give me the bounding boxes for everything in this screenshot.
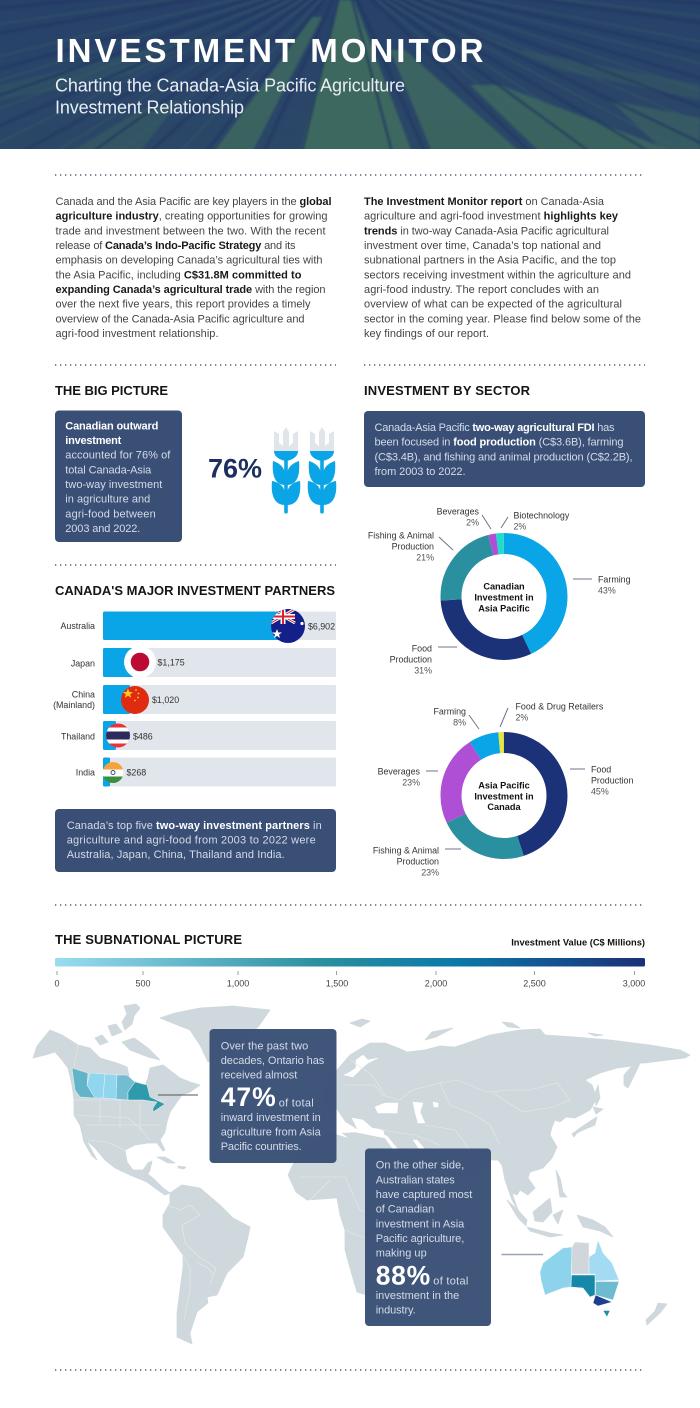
vineyard background [0,0,700,152]
legend: investment value colour scale [54,938,645,988]
donut chart: Canadian investment in Asia Pacific: Asia Pacific [478,604,530,614]
legend: investment value colour scale: Investment Value (C$ Millions) [511,938,645,948]
labels and leader lines: Biotechnology [514,510,570,520]
callout: Australia 88%: making up [376,1248,427,1260]
callout: top five partners: agriculture and agri-food from 2003 to 2022 were [67,835,316,847]
icon: wheat stalks [272,427,336,514]
labels and leader lines: Production [390,654,432,664]
labels and leader lines: 45% [591,786,609,796]
heading: the subnational picture: THE SUBNATIONAL PICTURE [55,932,242,947]
callout: Canadian outward investment [55,410,182,542]
callout: Australia 88%: investment in the [376,1290,459,1302]
map: land masses [33,1004,690,1344]
labels and leader lines [373,702,633,878]
labels and leader lines: Farming [598,574,631,584]
callout: Canadian outward investment: accounted for 76% of [65,450,171,462]
subtitle: Investment Relationship [55,98,244,118]
labels and leader lines: 2% [514,522,526,532]
intro text: left column: overview of the Canada-Asia Pacific agriculture and [56,313,304,325]
bar chart: investment partners [53,609,336,786]
callout: Ontario 47%: inward investment in [221,1112,321,1124]
intro text: right column [364,196,641,340]
labels and leader lines: Beverages [378,766,421,776]
bar: Thailand: $486 [133,732,153,742]
callout: Australia 88% [365,1148,491,1326]
callout: Canadian outward investment: Canadian outward [65,420,158,432]
intro text: right column: The Investment Monitor report on Canada-Asia [364,196,605,208]
connector: Australia [502,1254,543,1256]
intro text: left column: expanding Canada’s agricultural trade with the region [56,284,326,296]
callout: Ontario 47%: Over the past two [221,1040,308,1052]
callout: Canadian outward investment: investment [65,435,122,447]
donut chart: Asia Pacific investment in Canada [373,702,633,878]
subtitle: Charting the Canada-Asia Pacific Agriculture [55,76,405,96]
callout: two-way agricultural FDI: from 2003 to 2022. [374,466,466,478]
callout: Australia 88%: 88% [376,1260,430,1290]
callout: Canadian outward investment: agri-food between [65,508,156,520]
bar: Thailand [61,721,336,750]
stat: 76%: 76% [208,454,262,484]
heading: the big picture: THE BIG PICTURE [55,383,168,398]
map: Canadian provinces [72,1068,165,1112]
callout: Ontario 47%: Pacific countries. [221,1141,302,1153]
labels and leader lines: 2% [466,518,479,528]
callout: Ontario 47%: 47% [221,1082,276,1112]
bar: Australia [60,609,336,643]
legend: investment value colour scale: 1,500 [326,978,348,988]
labels and leader lines: 43% [598,586,616,596]
bar: China: China [72,690,95,700]
callout: Canadian outward investment: total Canada-Asia [65,464,152,476]
intro text: left column: agri-food investment relationship. [56,328,218,340]
callout: Australia 88%: Pacific agriculture, [376,1233,464,1245]
intro text: left column [56,196,332,340]
heading: major investment partners: CANADA'S MAJOR INVESTMENT PARTNERS [55,583,335,598]
donut chart: Canadian investment in Asia Pacific [368,506,631,676]
callout: two-way agricultural FDI [364,411,645,487]
callout: Ontario 47% [210,1029,336,1163]
callout: Canadian outward investment: two-way investment [65,479,162,491]
intro text: right column: key findings of our report. [364,328,489,340]
labels and leader lines: Food [591,764,611,774]
labels and leader lines: 23% [402,778,420,788]
intro text: left column: release of Canada’s Indo-Pacific Strategy and its [56,240,296,252]
bar: China [53,685,336,714]
labels and leader lines: 31% [414,666,432,676]
connector: Ontario [158,1094,198,1096]
callout: Ontario 47%: of total [279,1098,314,1110]
donut chart: Canadian investment in Asia Pacific: Canadian [483,582,525,592]
labels and leader lines: Fishing & Animal [368,530,434,540]
labels and leader lines: 2% [516,712,528,722]
intro text: right column: subnational partners in the Asia Pacific, and the top [364,255,616,267]
legend: investment value colour scale: 2,000 [425,978,447,988]
intro text: right column: sectors receiving investment within the agriculture and [364,269,631,281]
donut chart: Asia Pacific investment in Canada: Investment in [474,792,534,802]
intro text: right column: investment over time, Canada’s top national and [364,240,601,252]
callout: Ontario 47%: agriculture from Asia [221,1127,322,1139]
labels and leader lines: Production [591,776,633,786]
bar: Japan: $1,175 [158,658,185,668]
donut chart: Asia Pacific investment in Canada: Canada [487,802,521,812]
bar: Australia: $6,902 [308,622,335,632]
labels and leader lines [368,506,631,676]
legend: investment value colour scale: 3,000 [623,978,645,988]
callout: Australia 88%: of total [433,1276,468,1288]
labels and leader lines: 23% [421,868,439,878]
callout: Ontario 47%: received almost [221,1070,297,1082]
labels and leader lines: Fishing & Animal [373,846,439,856]
bar: China: $1,020 [152,695,179,705]
map: Australian states [540,1240,619,1317]
labels and leader lines: Farming [433,706,466,716]
legend: investment value colour scale: 0 [54,978,60,988]
title: INVESTMENT MONITOR [56,32,484,69]
donut chart: Asia Pacific investment in Canada: Asia Pacific [478,780,530,790]
heading: investment by sector: INVESTMENT BY SECTOR [364,383,531,398]
intro text: left column: Canada and the Asia Pacific are key players in the global [56,196,332,208]
callout: top five partners: Australia, Japan, China, Thailand and India. [67,849,285,861]
labels and leader lines: Food [412,644,432,654]
bar: Australia: Australia [60,621,95,631]
callout: two-way agricultural FDI: Canada-Asia Pacific two-way agricultural FDI has [374,422,615,434]
callout: Australia 88%: have captured most [376,1189,472,1201]
callout: Australia 88%: Australian states [376,1174,455,1186]
bar: China: (Mainland) [53,700,95,710]
callout: top five partners [55,809,336,872]
intro text: right column: trends in two-way Canada-Asia Pacific agricultural [364,225,609,237]
map: national borders [74,1045,570,1320]
intro text: right column: overview of what can be expected of the agricultural [364,299,622,311]
legend: investment value colour scale: 1,000 [227,978,249,988]
callout: two-way agricultural FDI: (C$3.4B), and fishing and animal production (C$2.2B), [374,451,632,463]
callout: two-way agricultural FDI: been focused in food production (C$3.6B), farming [374,437,624,449]
callout: Australia 88%: industry. [376,1305,416,1317]
map: inland seas [325,1055,438,1152]
callout: Australia 88%: On the other side, [376,1160,464,1172]
intro text: left column: over the next five years, this report provides a timely [56,299,311,311]
intro text: left column: emphasis on developing Canada’s agricultural ties with [56,255,322,267]
bar: Japan: Japan [71,658,95,668]
labels and leader lines: 21% [416,552,434,562]
intro text: right column: agriculture and agri-food investment highlights key [364,211,619,223]
labels and leader lines: 8% [453,718,466,728]
labels and leader lines: Production [397,856,439,866]
callout: Australia 88%: of Canadian [376,1204,434,1216]
bar: India: India [76,768,95,778]
callout: Canadian outward investment: 2003 and 2022. [65,523,140,535]
callout: Canadian outward investment: in agriculture and [65,494,150,506]
legend: investment value colour scale: 2,500 [523,978,546,988]
intro text: right column: agri-food industry. The report concludes with an [364,284,599,296]
bar: Japan [71,646,336,678]
header banner: vineyard photo with title [0,0,700,152]
subtitle [55,76,405,118]
labels and leader lines: Production [392,542,434,552]
labels and leader lines: Food & Drug Retailers [516,702,604,712]
callout: Ontario 47%: decades, Ontario has [221,1055,325,1067]
intro text: left column: the Asia Pacific, including C$31.8M committed to [56,269,302,281]
intro text: right column: sector in the coming year. Please find below some of the [364,313,641,325]
donut chart: Canadian investment in Asia Pacific: Investment in [474,592,534,602]
labels and leader lines: Beverages [437,506,480,516]
callout: top five partners: Canada’s top five two-way investment partners in [67,820,322,832]
bar: Thailand: Thailand [61,732,95,742]
callout: Australia 88%: investment in Asia [376,1218,465,1230]
world map [33,1004,690,1344]
intro text: left column: agriculture industry, creating opportunities for growing [56,211,328,223]
intro text: left column: trade and investment between the two. With the recent [56,225,326,237]
legend: investment value colour scale: 500 [135,978,151,988]
bar: India: $268 [126,768,146,778]
bar: India [76,758,336,786]
